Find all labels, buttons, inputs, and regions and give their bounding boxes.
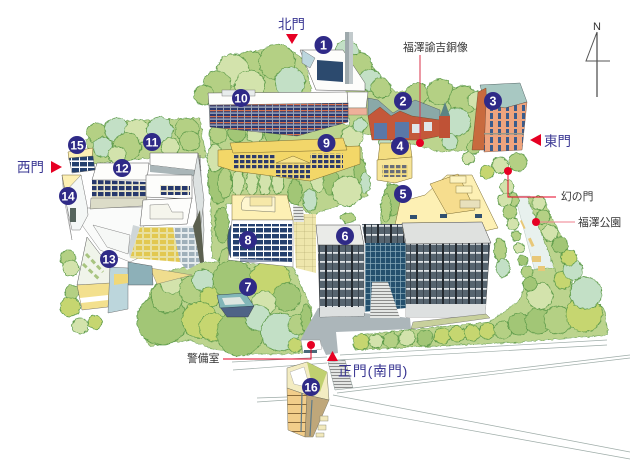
park path — [515, 196, 564, 283]
central tower — [128, 198, 204, 270]
badge 14 — [59, 187, 77, 205]
badge 2 — [394, 92, 412, 110]
badge 11: 11 — [146, 136, 159, 150]
label: Fukuzawa park — [532, 216, 621, 229]
label: south main gate: 正門(南門) — [338, 363, 408, 379]
badge 10 — [232, 89, 250, 107]
label: east gate: 東門 — [544, 134, 571, 149]
badge 13: 13 — [102, 252, 116, 266]
label: south main gate — [327, 351, 408, 379]
badge 1: 1 — [320, 38, 327, 52]
building 14 — [62, 175, 88, 240]
label: phantom gate — [504, 167, 593, 203]
building 5 — [395, 174, 498, 232]
label: guard room — [187, 341, 315, 365]
building 1 — [300, 32, 365, 91]
building 2 — [368, 98, 450, 140]
building 4 — [377, 143, 412, 183]
lower-left campus complex: buildings 11, 12, 13 — [77, 153, 204, 313]
road lines — [232, 340, 630, 459]
label: phantom gate: 幻の門 — [561, 190, 593, 203]
building 11 — [146, 153, 204, 232]
building 10 — [208, 90, 348, 136]
badge 12: 12 — [115, 162, 129, 176]
building 7 — [217, 293, 254, 317]
badge 12 — [113, 159, 131, 177]
plaza — [300, 308, 411, 355]
badge 15: 15 — [70, 138, 84, 152]
badge 13 — [100, 250, 118, 268]
badge 4: 4 — [397, 140, 404, 154]
badge 9: 9 — [323, 136, 330, 150]
label: guard room: 警備室 — [187, 351, 220, 365]
label: west gate — [17, 160, 62, 175]
badge 14: 14 — [61, 190, 75, 204]
badge 7 — [239, 278, 257, 296]
badge 15 — [68, 136, 86, 154]
building 15 — [68, 148, 95, 173]
building 13 — [77, 237, 153, 313]
label: Fukuzawa statue: 福澤諭吉銅像 — [403, 40, 468, 54]
building 9 — [218, 138, 360, 181]
badge 16: 16 — [304, 380, 318, 394]
badge 4 — [391, 137, 409, 155]
badge 10: 10 — [234, 92, 248, 106]
label: north gate: 北門 — [278, 17, 305, 32]
compass north arrow — [586, 21, 610, 97]
label: Fukuzawa park: 福澤公園 — [578, 216, 621, 229]
building 16 — [287, 362, 329, 437]
badge 8: 8 — [245, 234, 252, 248]
badge 5 — [394, 185, 412, 203]
label: west gate: 西門 — [17, 160, 44, 175]
badge 8 — [239, 231, 257, 249]
badge 3: 3 — [490, 94, 497, 108]
yellow wedge — [150, 268, 192, 284]
building 8 — [228, 195, 316, 273]
badge 2: 2 — [400, 94, 407, 108]
badge 9 — [318, 134, 336, 152]
building 3 — [472, 83, 527, 152]
building 6 — [316, 222, 491, 329]
badge 6 — [336, 227, 354, 245]
badge 7: 7 — [245, 280, 252, 294]
badge 3 — [484, 92, 502, 110]
badge 16 — [302, 378, 320, 396]
badge 11 — [143, 133, 161, 151]
compass north arrow: N — [593, 21, 601, 33]
badge 6: 6 — [342, 230, 349, 244]
label: east gate — [530, 134, 571, 149]
label: north gate — [278, 17, 305, 44]
connector between 10 and 2 — [347, 92, 368, 115]
badge 1 — [314, 36, 332, 54]
trees — [60, 40, 608, 356]
crosswalk — [328, 360, 353, 390]
badge 5: 5 — [400, 188, 407, 202]
building 12 — [90, 163, 149, 209]
guard house — [301, 340, 322, 353]
label: Fukuzawa statue — [403, 40, 468, 147]
park yellow accents — [520, 220, 545, 271]
